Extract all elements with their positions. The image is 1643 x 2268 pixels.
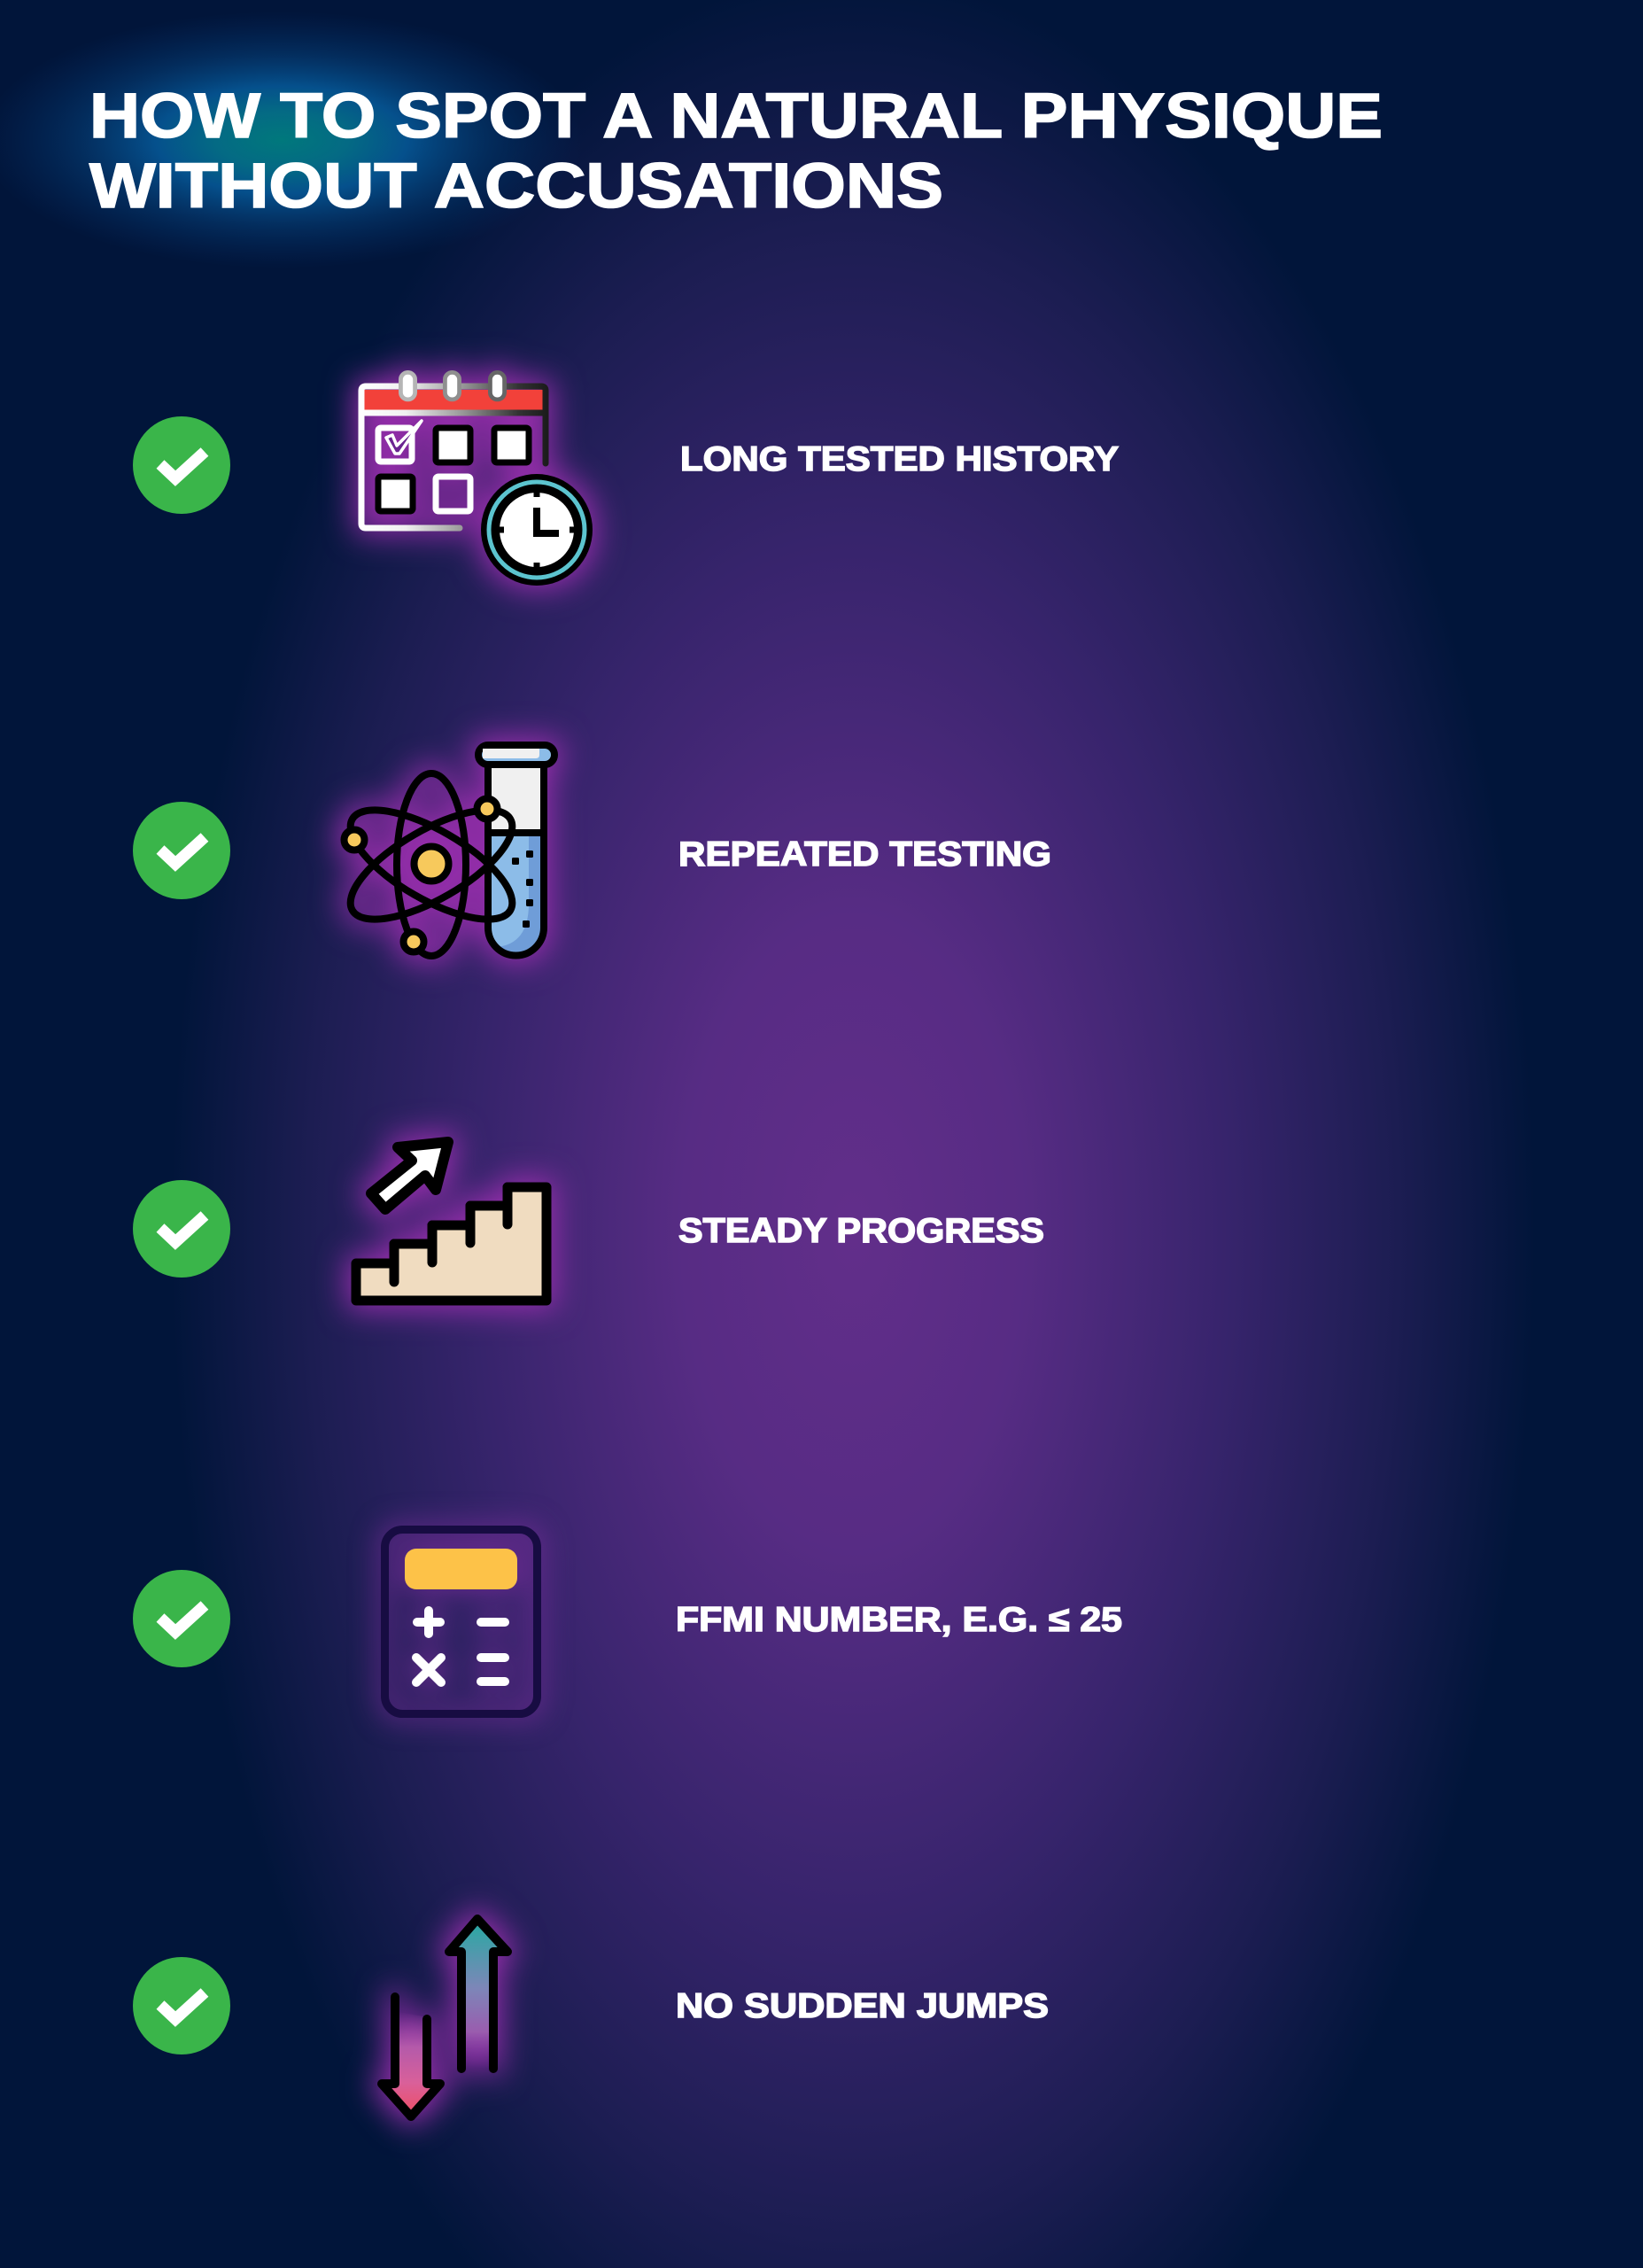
icon: calculator [384, 1529, 537, 1713]
label: repeated testing: REPEATED TESTING [678, 835, 1051, 874]
icon: green check [133, 416, 230, 514]
icon: green check [133, 1180, 230, 1278]
icon: stairs with arrow [356, 1142, 546, 1301]
row 2: repeated testing [133, 745, 1051, 956]
label: long tested history: LONG TESTED HISTORY [680, 440, 1119, 478]
icon: green check [133, 1570, 230, 1667]
label: no sudden jumps: NO SUDDEN JUMPS [676, 1987, 1049, 2025]
icon: atom and test tube [335, 745, 554, 956]
row 1: long tested history [133, 372, 1119, 586]
icon: green check [133, 802, 230, 899]
icon: green check [133, 1957, 230, 2054]
icon: calendar with clock [361, 372, 593, 586]
title: WITHOUT ACCUSATIONS [89, 151, 943, 221]
label: steady progress: STEADY PROGRESS [678, 1212, 1044, 1250]
title [89, 82, 1383, 221]
title: HOW TO SPOT A NATURAL PHYSIQUE [89, 82, 1383, 151]
row 5: no sudden jumps [133, 1919, 1049, 2117]
label: ffmi number: FFMI NUMBER, E.G. ≤ 25 [676, 1601, 1122, 1639]
row 4: ffmi number [133, 1529, 1122, 1713]
row 3: steady progress [133, 1142, 1044, 1301]
icon: up and down arrows [382, 1919, 508, 2117]
icon detail: bubbles [512, 850, 533, 928]
